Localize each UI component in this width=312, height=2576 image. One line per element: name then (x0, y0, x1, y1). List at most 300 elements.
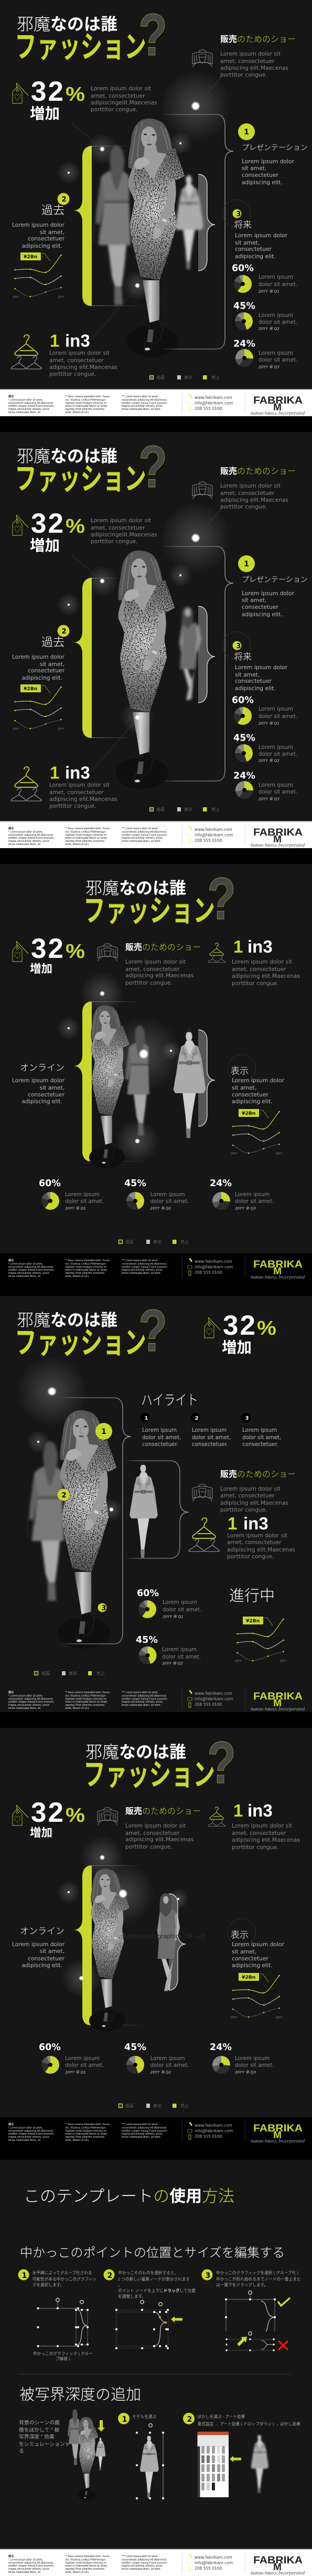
title: 邪魔なのは誰 (85, 1743, 186, 1761)
footer page 5 black: porttitor congue massa.Fusce posuere, (8, 2132, 55, 2136)
32 percent increase stat: % (257, 1317, 276, 1339)
pie 45 percent: dolor sit amet. (259, 320, 297, 325)
one in three stat: 1 (233, 1801, 243, 1820)
footer page 3 black: magna sed pulvinar ultricies, purus (122, 1269, 163, 1272)
depth of field description: 写界深度 " 効果 (19, 2433, 55, 2440)
pie 60 percent: 60% (137, 1588, 159, 1599)
sales show block: Lorem ipsum dolor sit (220, 483, 281, 489)
step: pick model: 1 (122, 2415, 127, 2424)
pie 60 percent (39, 1178, 104, 1210)
pie 45 percent: 20YY 年 Q2 (259, 326, 279, 331)
line chart: 20YY (12, 727, 19, 731)
title: ファッション (83, 1758, 215, 1792)
sales show block: porttitor congue. (220, 1507, 267, 1513)
32 percent increase stat: porttitor congue. (91, 107, 138, 113)
title: 邪魔なのは誰 (17, 447, 117, 466)
32 percent increase stat (205, 1310, 276, 1356)
sales show block: adipiscing elit.Maecenas (220, 1500, 288, 1506)
line chart (230, 1109, 283, 1156)
line chart (12, 252, 64, 299)
footer page 5 black: consectetuer adipiscing elit.Maecenas (8, 2130, 53, 2133)
step: pick blur: 2 (187, 2415, 192, 2424)
online label (12, 1063, 65, 1105)
footer page 5 black: netus et malesuada fames ac turpis (65, 2132, 107, 2136)
footer page 6: porttitor congue massa.Fusce posuere, (122, 2561, 168, 2564)
one in three stat: amet, consectetuer (232, 966, 286, 973)
footer page 1 (0, 389, 312, 416)
title (83, 1729, 236, 1796)
footer page 2: Incorporated (278, 842, 305, 848)
pie 60 percent: dolor sit amet. (259, 282, 297, 288)
sales show block: porttitor congue. (125, 1844, 173, 1850)
pie 45 percent: 45% (233, 301, 255, 312)
footer page 1: lectus malesuada libero, sit amet. (122, 408, 161, 411)
pie 45 percent: 20YY 年 Q2 (162, 1661, 183, 1666)
model markers: 1 (101, 1428, 106, 1436)
one in three stat: porttitor congue. (232, 1844, 279, 1851)
display label: 表示 (231, 1930, 249, 1940)
background model blurred back view (124, 1026, 149, 1136)
sales show block: 販売のためのショー (125, 1807, 201, 1816)
one in three stat: amet, consectetuer (49, 357, 104, 364)
step 2: を調整します。 (118, 2294, 146, 2299)
footer page 4 dark: * Lorem ipsum dolor sit amet, (8, 1694, 43, 1697)
diagram 1: ungrouped brace handles (33, 2298, 93, 2361)
footer page 3 black: lectus malesuada libero, sit (8, 1275, 40, 1278)
32 percent increase stat: adipiscingelit.Maecenas (91, 100, 157, 106)
point 1 presentation: sit amet, (242, 597, 266, 604)
one in three stat: adipiscing elit.Maecenas (49, 796, 117, 803)
legend: 売上 (211, 375, 220, 380)
second brace (125, 1461, 189, 1558)
right thin brace (162, 114, 233, 349)
glow light top (160, 502, 231, 574)
footer page 5 black: est. Vivamus a tellus.Pellentesque (65, 2127, 105, 2130)
legend: 表示 (153, 2103, 162, 2108)
one in three stat: adipiscing elit.Maecenas (227, 1547, 295, 1553)
pie 60 percent: dolor sit amet. (259, 714, 297, 720)
big brace (60, 1398, 131, 1644)
depth of field composite example (67, 2409, 105, 2500)
footer page 5 black: consectetuer adipiscing elit.Maecenas (122, 2127, 167, 2130)
highlights block: consectetuer. (192, 1442, 228, 1448)
footer page 5 black: info@fabrikam.com (195, 2129, 233, 2133)
pie 24 percent: dolor sit amet. (259, 357, 297, 363)
step 1: 可能性がある中かっこのグラフィッ (33, 2276, 96, 2282)
pie 24 percent: Lorem ipsum (235, 1192, 270, 1198)
legend: 売上 (180, 1239, 189, 1244)
footer page 4 dark: egestas.Proin pharetra nonummy (65, 1704, 105, 1707)
footer page 2: porttitor congue massa.Fusce posuere, (122, 833, 168, 837)
pie 45 percent: Lorem ipsum (150, 2056, 185, 2062)
online label: Lorem ipsum dolor (12, 1941, 65, 1948)
point 1 presentation: プレゼンテーション (242, 575, 308, 584)
footer page 1: pede. Mauris et orci. (65, 411, 89, 414)
point 3 future: 将来 (234, 652, 252, 662)
footer page 3 black: info@fabrikam.com (195, 1265, 233, 1269)
32 percent increase stat: 32 (31, 1797, 63, 1828)
footer page 6: porttitor congue massa.Fusce posuere, (8, 2564, 55, 2568)
legend: 成長 (41, 1671, 50, 1676)
legend: 成長 (156, 807, 165, 812)
legend (35, 1671, 105, 1676)
pie 24 percent: 20YY 年 Q3 (235, 2070, 256, 2074)
footer page 1: info@fabrikam.com (195, 401, 233, 405)
big glow dot over model (138, 1049, 149, 1059)
step: pick blur: 書式設定 → アート効果 ( ドロップダウン ) → ぼかし効果 (197, 2421, 300, 2426)
footer page 5 black: magna sed pulvinar ultricies, purus (8, 2136, 49, 2139)
legend: 成長 (125, 1239, 134, 1244)
footer page 5 black: pede. Mauris et orci. (65, 2139, 89, 2142)
right thin brace (162, 546, 233, 781)
one in three stat: Lorem ipsum dolor sit (232, 1823, 292, 1829)
footer page 4 dark: est. Vivamus a tellus.Pellentesque (65, 1694, 105, 1697)
right small brace panel (198, 174, 215, 271)
footer page 4 dark: 208 555 0100 (195, 1702, 222, 1707)
pie 24 percent: dolor sit amet. (235, 2063, 274, 2068)
point 2 past (12, 193, 69, 249)
pie 45 percent (136, 1635, 201, 1666)
pie 45 percent: dolor sit amet. (259, 752, 297, 757)
32 percent increase stat: 32 (31, 76, 63, 107)
pie 60 percent (232, 695, 297, 725)
footer page 1: est. Vivamus a tellus.Pellentesque (65, 399, 105, 402)
footer page 5 black: FABRIKA (253, 2123, 303, 2134)
footer page 2: lectus malesuada libero, sit amet. (122, 840, 161, 843)
footer page 5 black: habitant morbi tristique senectus et (65, 2130, 106, 2133)
footer page 1: Incorporated (278, 410, 305, 416)
highlights block: Lorem ipsum (142, 1428, 177, 1433)
pie 60 percent: Lorem ipsum (259, 275, 293, 280)
page 3: three-column top row with pies below (0, 864, 312, 1296)
pie 24 percent: 24% (210, 2042, 232, 2053)
step 2: 。 (118, 2283, 122, 2287)
footer page 1: netus et malesuada fames ac turpis (65, 405, 107, 408)
footer page 6: lectus malesuada libero, sit (8, 2571, 40, 2574)
pie 24 percent (210, 1178, 274, 1210)
title (15, 2, 167, 68)
footer page 3 black: consectetuer adipiscing elit.Maecenas (8, 1266, 53, 1269)
title (83, 865, 236, 932)
pie 45 percent: Lorem ipsum (162, 1647, 197, 1653)
one in three stat: in3 (65, 331, 90, 351)
highlights block: consectetuer. (242, 1442, 278, 1448)
small brace panel (169, 1894, 186, 1990)
footer page 3 black: consectetuer adipiscing elit.Maecenas (122, 1263, 167, 1266)
point 3 future: consectetuer (235, 678, 272, 684)
footer page 1: magna sed pulvinar ultricies, purus (8, 408, 49, 411)
footer page 2: ** Nunc viverra imperdiet enim. Fusce (65, 827, 110, 830)
title: 邪魔なのは誰 (85, 879, 186, 898)
display label: consectetuer (232, 1091, 269, 1098)
footer page 4 dark: consectetuer adipiscing elit.Maecenas (122, 1694, 167, 1697)
sales show block: Lorem ipsum dolor sit (220, 1486, 281, 1492)
footer page 2: Fashion Fabrics (251, 843, 277, 848)
footer page 2: magna sed pulvinar ultricies, purus (8, 840, 49, 843)
32 percent increase stat: 増加 (30, 963, 52, 975)
title: ファッション (15, 30, 146, 64)
32 percent increase stat: % (66, 941, 85, 963)
one in three stat (11, 722, 134, 809)
footer page 4 dark: Fashion Fabrics (251, 1707, 277, 1712)
footer page 3 black: est. Vivamus a tellus.Pellentesque (65, 1263, 105, 1266)
diagram 2: brace with edit nodes (115, 2300, 182, 2349)
footer page 2: consectetuer adipiscing elit.Maecenas (122, 830, 167, 833)
line chart: 20YY (57, 296, 64, 299)
title: ? (138, 1297, 167, 1364)
background model blurred back view (94, 145, 131, 305)
pie 24 percent: dolor sit amet. (259, 789, 297, 795)
footer page 5 black (0, 2117, 312, 2160)
line chart: 20YY (12, 296, 19, 299)
step 1: 1 (22, 2272, 27, 2280)
footer page 2: www.fabrikam.com (195, 827, 232, 832)
step 3: 中かっこが折れ始めるまでノードの一番上また (216, 2276, 300, 2282)
sales show block: amet, consectetuer (125, 966, 180, 973)
point 2 past: sit amet, (40, 229, 64, 236)
footer page 4 dark: FABRIKA (253, 1691, 303, 1702)
footer page 6: * Lorem ipsum dolor sit amet, (8, 2558, 43, 2561)
footer page 1: consectetuer adipiscing elit.Maecenas (8, 402, 53, 405)
display label: consectetuer (232, 1955, 269, 1962)
footer page 5 black: 208 555 0100 (195, 2134, 222, 2139)
footer page 2: FABRIKA (253, 827, 303, 838)
page 2: same layout with model variation (0, 432, 312, 848)
pie 60 percent: 20YY 年 Q1 (163, 1614, 184, 1619)
sales show block: adipiscing elit.Maecenas (125, 973, 193, 979)
footer page 2: porttitor congue massa.Fusce posuere, (8, 837, 55, 840)
sales show block (192, 1470, 296, 1513)
footer page 4 dark: lectus malesuada libero, sit (8, 1707, 40, 1710)
footer page 6: lectus malesuada libero, sit amet. (122, 2568, 161, 2571)
point 3 future: sit amet, (235, 239, 260, 246)
pie 45 percent: Lorem ipsum (150, 1192, 185, 1198)
legend (150, 375, 220, 380)
line chart: 20YY (275, 1153, 283, 1156)
footer page 6: 脚注 (8, 2554, 14, 2558)
main model in sequin dress (58, 1410, 116, 1649)
footer page 4 dark: M (273, 1698, 282, 1709)
one in three stat: in3 (248, 1801, 273, 1820)
pie 60 percent: 20YY 年 Q1 (259, 721, 279, 725)
point 3 future (222, 199, 288, 260)
legend: 表示 (184, 807, 192, 812)
footer page 3 black: 脚注 (8, 1259, 14, 1262)
pie 60 percent: 20YY 年 Q1 (65, 1206, 86, 1210)
pie 24 percent: 20YY 年 Q3 (235, 1206, 256, 1210)
footer page 5 black: * Lorem ipsum dolor sit amet, (8, 2127, 43, 2130)
legend: 成長 (125, 2103, 134, 2108)
highlights block: dolor sit amet, (242, 1435, 281, 1441)
diagram 1: ungrouped brace handles: プ解除 ) (56, 2356, 70, 2361)
footer page 6: pede. Mauris et orci. (65, 2571, 89, 2574)
left yellow brace (73, 1001, 144, 1162)
online label (12, 1926, 65, 1969)
in progress heading: 進行中 (229, 1587, 275, 1604)
point 2 past: sit amet, (40, 661, 64, 668)
depth of field description: る (19, 2448, 24, 2454)
pie 60 percent: 60% (39, 1178, 61, 1189)
sales show block (192, 467, 296, 510)
sales show block: porttitor congue. (220, 72, 267, 78)
left yellow brace (73, 1865, 144, 2025)
diagram 1: ungrouped brace handles: 中かっこのグラフィック ( グルー (33, 2351, 93, 2356)
footer page 6: *** Lorem ipsum dolor sit amet, (122, 2555, 158, 2558)
footer page 3 black: * Lorem ipsum dolor sit amet, (8, 1263, 43, 1266)
step 3 (201, 2269, 300, 2287)
dress model (157, 1893, 180, 1991)
pie 45 percent: 20YY 年 Q2 (150, 2070, 171, 2074)
32 percent increase stat: Lorem ipsum dolor sit (91, 518, 151, 524)
legend (150, 807, 220, 812)
point 1 presentation: consectetuer (242, 172, 279, 178)
point 1 presentation (238, 555, 308, 618)
step 2: 2 つの新しい編集ノードが表示されます (118, 2276, 190, 2282)
footer page 2: info@fabrikam.com (195, 832, 233, 838)
32 percent increase stat: amet, consectetuer (91, 525, 145, 531)
32 percent increase stat: 32 (223, 1310, 255, 1341)
pie 45 percent: dolor sit amet. (162, 1654, 201, 1660)
display label: adipiscing elit. (232, 1098, 273, 1105)
footer page 2: est. Vivamus a tellus.Pellentesque (65, 830, 105, 833)
pie 60 percent: 20YY 年 Q1 (65, 2070, 86, 2074)
pie 24 percent: 24% (233, 339, 255, 350)
footer page 6: Fashion Fabrics (251, 2571, 277, 2575)
footer page 2: * Lorem ipsum dolor sit amet, (8, 830, 43, 833)
point 2 past: 過去 (41, 636, 64, 649)
pie 24 percent: Lorem ipsum (235, 2056, 270, 2062)
footer page 3 black: habitant morbi tristique senectus et (65, 1266, 106, 1269)
footer page 5 black: lectus malesuada libero, sit (8, 2139, 40, 2142)
pie 60 percent: dolor sit amet. (65, 1199, 104, 1205)
footer page 6: ** Nunc viverra imperdiet enim. Fusce (65, 2555, 110, 2558)
main model in sequin dress (116, 551, 175, 789)
footer page 4 dark: porttitor congue massa.Fusce posuere, (122, 1697, 168, 1701)
pie 60 percent: dolor sit amet. (65, 2063, 104, 2068)
footer page 2: egestas.Proin pharetra nonummy (65, 840, 105, 843)
display label: Lorem ipsum dolor (232, 1941, 285, 1948)
highlights block: consectetuer. (142, 1442, 178, 1448)
line chart: ¥2Bn (242, 1111, 255, 1116)
step: pick model: モデルを選ぶ (132, 2414, 156, 2419)
online label: オンライン (20, 1063, 64, 1073)
footer page 2: netus et malesuada fames ac turpis (65, 837, 107, 840)
sales show block: 販売のためのショー (220, 35, 296, 44)
point 1 presentation: adipiscing elit. (242, 611, 283, 618)
one in three stat: amet, consectetuer (232, 1830, 286, 1836)
sales show block: 販売のためのショー (220, 1470, 296, 1479)
title: ファッション (15, 1326, 146, 1360)
title (15, 1297, 167, 1364)
pie 60 percent: Lorem ipsum (259, 706, 293, 712)
point 3 future: Lorem ipsum dolor (235, 664, 288, 671)
pie 24 percent (210, 2042, 274, 2074)
pie 24 percent: 24% (233, 770, 255, 781)
footer page 3 black: Incorporated (278, 1274, 305, 1280)
one in three stat: Lorem ipsum dolor sit (49, 350, 110, 356)
display label (228, 1055, 285, 1105)
online label: Lorem ipsum dolor (12, 1077, 65, 1084)
one in three stat: porttitor congue. (49, 371, 96, 377)
dots over models (79, 1889, 179, 1981)
one in three stat: in3 (248, 937, 273, 956)
pie 45 percent: 45% (233, 733, 255, 743)
pie 24 percent: dolor sit amet. (235, 1199, 274, 1205)
title: ? (138, 2, 167, 68)
legend: 売上 (96, 1671, 105, 1676)
point 1 presentation: consectetuer (242, 604, 279, 610)
footer page 1: consectetuer adipiscing elit.Maecenas (122, 399, 167, 402)
point 1 presentation: sit amet, (242, 165, 266, 172)
step: pick blur (183, 2413, 300, 2426)
point 2 past: adipiscing elit. (21, 674, 62, 681)
file name artefact: Fashion Infographics_SB - v3 (123, 1933, 205, 1940)
32 percent increase stat: 32 (31, 508, 63, 539)
line chart (230, 1973, 283, 2020)
footer page 5 black: *** Lorem ipsum dolor sit amet, (122, 2123, 158, 2126)
legend (119, 2103, 189, 2108)
point 1 presentation: プレゼンテーション (242, 143, 308, 152)
one in three stat (208, 1801, 300, 1851)
footer page 1: magna sed pulvinar ultricies, purus (122, 405, 163, 408)
legend: 売上 (180, 2103, 189, 2108)
footer page 6: netus et malesuada fames ac turpis (65, 2564, 107, 2568)
highlights block: 3 (245, 1416, 249, 1421)
sales show block: 販売のためのショー (220, 467, 296, 476)
footer page 4 dark: Incorporated (278, 1706, 305, 1712)
footer page 2 (0, 821, 312, 848)
footer page 6: FABRIKA (253, 2554, 303, 2566)
footer page 5 black: 脚注 (8, 2123, 14, 2126)
section heading brace editing: 中かっこのポイントの位置とサイズを編集する (20, 2246, 285, 2260)
point 2 past: 過去 (41, 204, 64, 217)
title: ? (207, 1729, 236, 1796)
footer page 3 black: lectus malesuada libero, sit amet. (122, 1272, 161, 1275)
display label: 表示 (231, 1066, 249, 1076)
model markers: 3 (101, 1604, 106, 1612)
point 2 past: 2 (61, 196, 67, 204)
footer page 5 black: porttitor congue massa.Fusce posuere, (122, 2130, 168, 2133)
32 percent increase stat (13, 1797, 85, 1839)
footer page 6: egestas.Proin pharetra nonummy (65, 2568, 105, 2571)
model markers (58, 1423, 112, 1612)
sales show block: amet, consectetuer (125, 1830, 180, 1836)
footer page 4 dark: netus et malesuada fames ac turpis (65, 1701, 107, 1704)
32 percent increase stat: % (66, 83, 85, 105)
sales show block: 販売のためのショー (125, 943, 201, 952)
one in three stat: Lorem ipsum dolor sit (49, 782, 110, 788)
footer page 6: magna sed pulvinar ultricies, purus (8, 2568, 49, 2571)
page 1: fashion layout with brace on right (0, 0, 312, 389)
footer page 4 dark: info@fabrikam.com (195, 1696, 233, 1702)
page 4: highlights layout (0, 1296, 312, 1712)
footer page 6: 208 555 0100 (195, 2566, 222, 2571)
step 2: 2 (107, 2272, 112, 2280)
footer page 5 black: lectus malesuada libero, sit amet. (122, 2136, 161, 2139)
line chart: ¥2Bn (24, 686, 37, 692)
step 3: 3 (206, 2272, 210, 2280)
footer page 1: 208 555 0100 (195, 406, 222, 411)
footer page 1: lectus malesuada libero, sit (8, 411, 40, 414)
sales show block: adipiscing elit.Maecenas (220, 65, 288, 71)
footer page 1: Fashion Fabrics (251, 411, 277, 416)
title: 邪魔なのは誰 (17, 15, 117, 34)
footer page 6: consectetuer adipiscing elit.Maecenas (8, 2561, 53, 2564)
step 2 (104, 2269, 196, 2299)
trench coat model (130, 1460, 158, 1558)
legend: 売上 (211, 807, 220, 812)
display label: sit amet, (232, 1084, 256, 1091)
